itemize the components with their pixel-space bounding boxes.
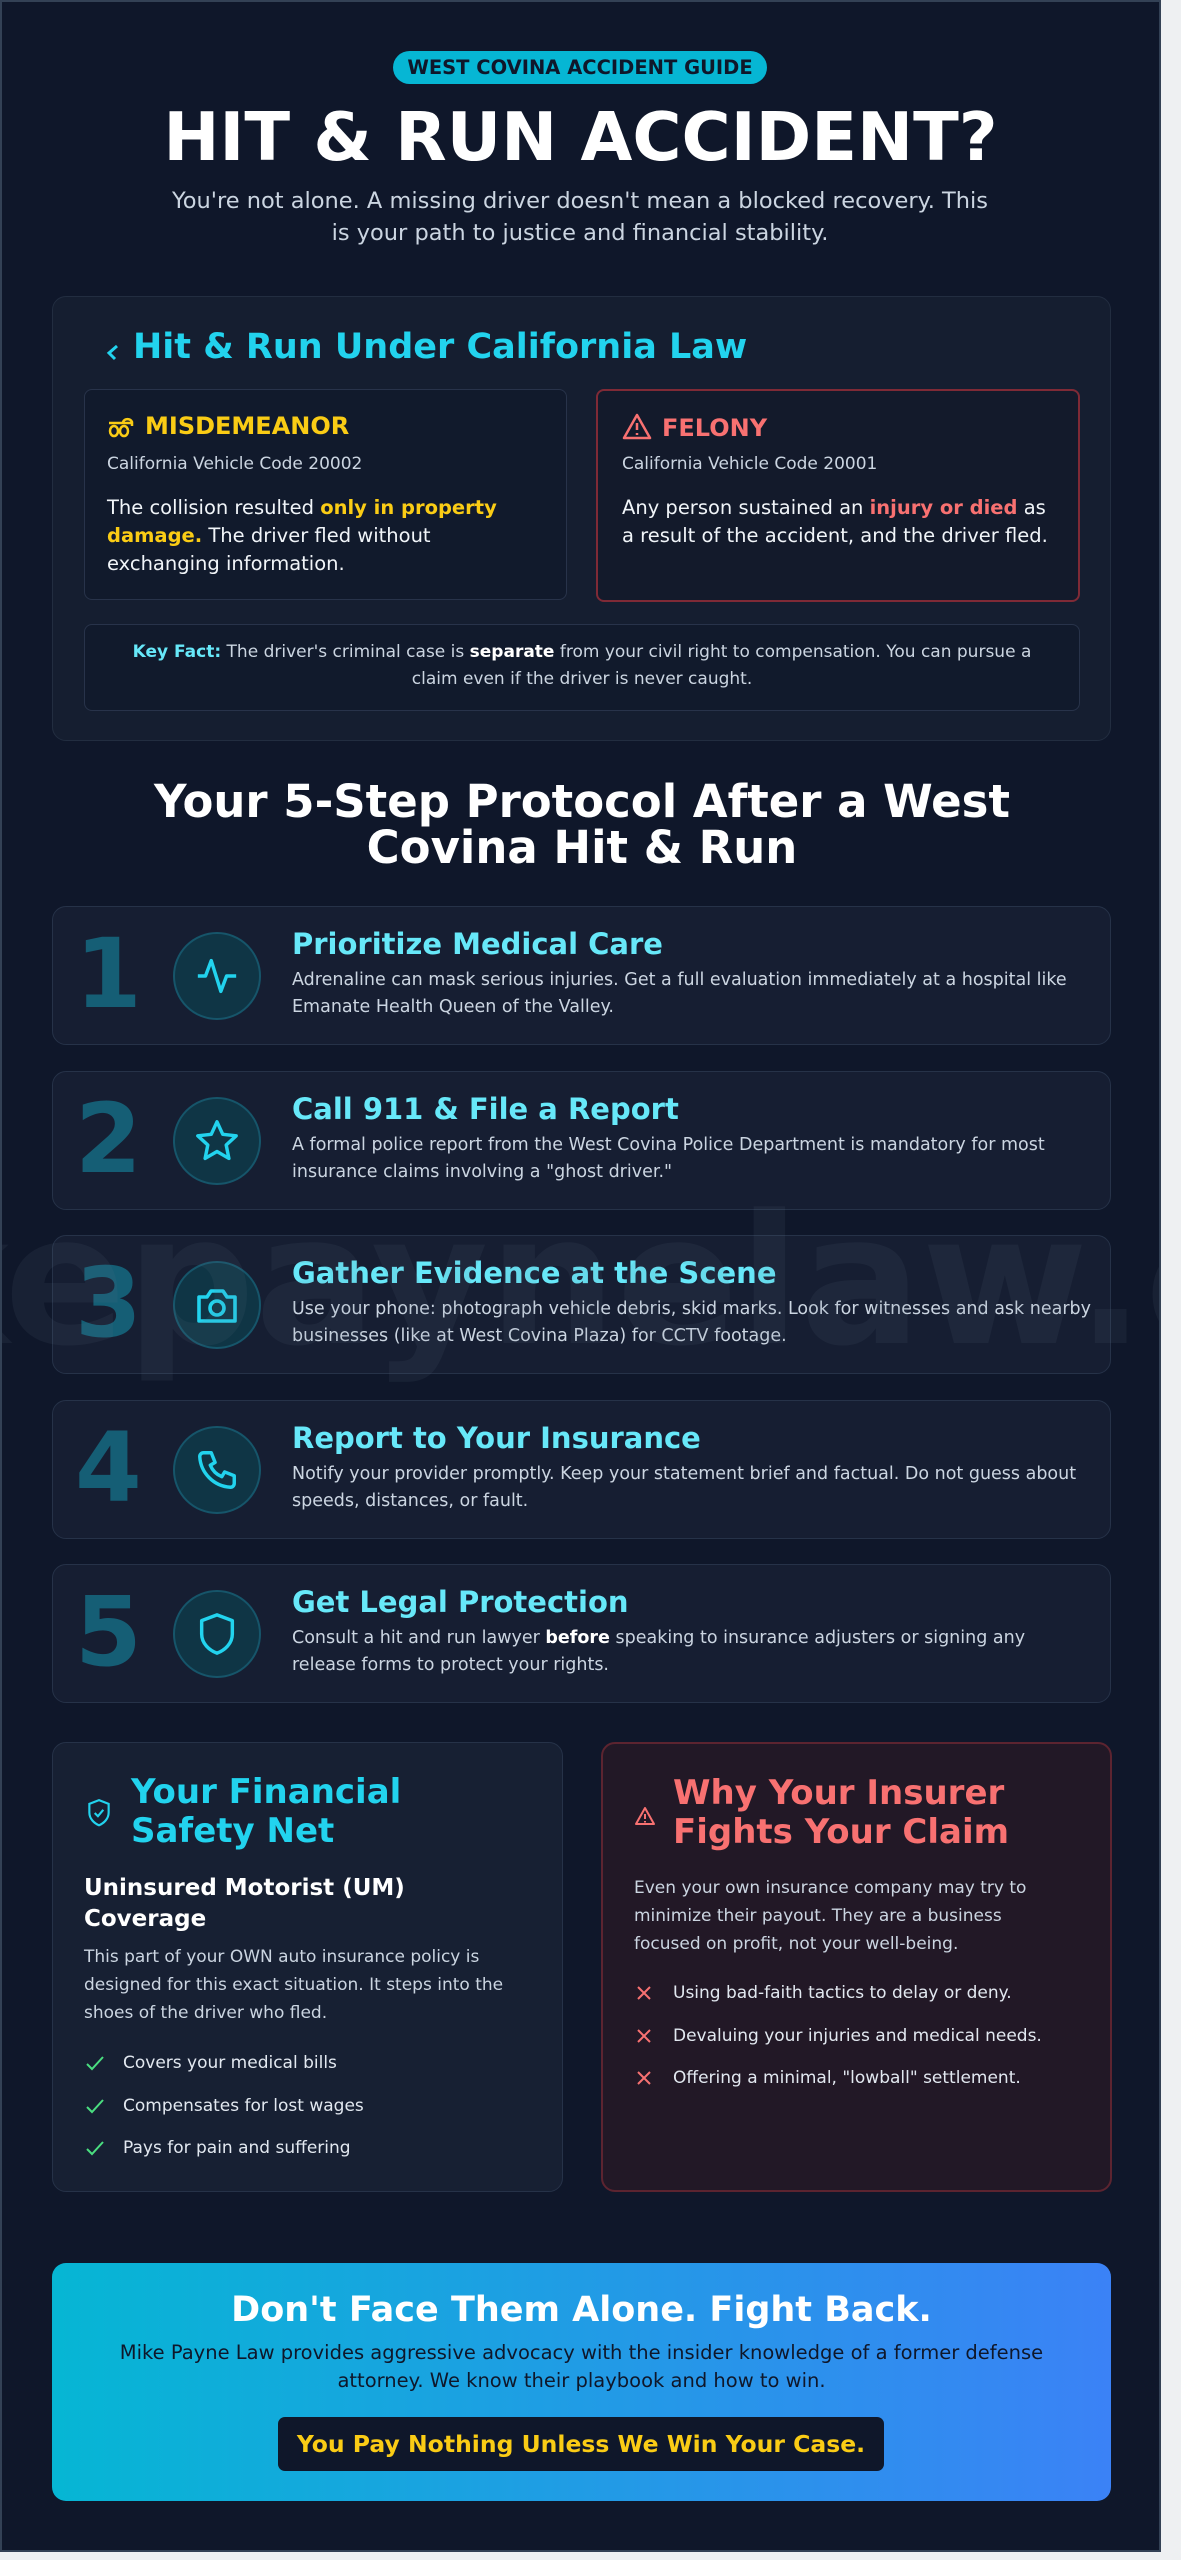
misdemeanor heading: MISDEMEANOR xyxy=(145,412,349,440)
title: HIT & RUN ACCIDENT? xyxy=(163,98,998,176)
checklist: Covers your medical bills xyxy=(123,2053,337,2073)
step 3: Use your phone: photograph vehicle debris, skid marks. Look for witnesses and ask nearby xyxy=(292,1299,1091,1319)
icon: gavel xyxy=(106,345,118,360)
CTA banner xyxy=(52,2263,1111,2501)
step 2 xyxy=(52,1071,1111,1210)
list: Devaluing your injuries and medical needs. xyxy=(673,2026,1042,2046)
subtitle: Uninsured Motorist (UM) Coverage xyxy=(84,1875,405,1932)
icon: shield check xyxy=(88,1799,110,1826)
card: felony xyxy=(596,389,1080,602)
step 5 xyxy=(52,1564,1111,1703)
step 5: Get Legal Protection xyxy=(292,1585,629,1619)
step 4: speeds, distances, or fault. xyxy=(292,1491,528,1511)
icon: warning xyxy=(622,414,652,440)
CTA button xyxy=(278,2417,884,2471)
CTA text: Mike Payne Law provides aggressive advocacy with the insider knowledge of a former defense attorney. We know their playbook and how to win. xyxy=(120,2341,1043,2392)
step 2: insurance claims involving a "ghost driver." xyxy=(292,1162,672,1182)
step 1: Adrenaline can mask serious injuries. Get a full evaluation immediately at a hospital like Emanate Health Queen of the Valley. xyxy=(292,970,1067,1017)
section heading: protocol: Your 5-Step Protocol After a West Covina Hit & Run xyxy=(154,775,1010,874)
step 4: 4 xyxy=(75,1412,142,1524)
felony heading: FELONY xyxy=(662,414,767,442)
panel: financial safety net xyxy=(52,1742,563,2192)
step 4 xyxy=(52,1400,1111,1539)
icon: pulse xyxy=(173,932,261,1020)
code: California Vehicle Code 20001 xyxy=(622,454,877,474)
step 4: Notify your provider promptly. Keep your statement brief and factual. Do not guess about xyxy=(292,1464,1076,1484)
heading: Hit & Run Under California Law xyxy=(133,327,747,367)
step 1 xyxy=(52,906,1111,1045)
card: misdemeanor xyxy=(84,389,567,600)
list: Offering a minimal, "lowball" settlement. xyxy=(673,2068,1021,2088)
title xyxy=(130,1772,401,1851)
step 1: 1 xyxy=(75,918,142,1030)
icon: phone xyxy=(173,1426,261,1514)
step 3: 3 xyxy=(75,1247,142,1359)
list xyxy=(637,1983,1042,2088)
checklist xyxy=(86,2053,364,2158)
description: Even your own insurance company may try to minimize their payout. They are a business focused on profit, not your well-being. xyxy=(634,1878,1026,1954)
step 5: 5 xyxy=(75,1576,142,1688)
panel: insurer fights claim xyxy=(601,1742,1112,2192)
subtitle xyxy=(172,188,988,246)
step 2: Call 911 & File a Report xyxy=(292,1092,679,1126)
icon: star xyxy=(173,1097,261,1185)
checklist: Compensates for lost wages xyxy=(123,2096,364,2116)
step 3 xyxy=(52,1235,1111,1374)
subtitle: You're not alone. A missing driver doesn't mean a blocked recovery. This xyxy=(172,188,988,214)
step 3: businesses (like at West Covina Plaza) for CCTV footage. xyxy=(292,1326,787,1346)
CTA button: You Pay Nothing Unless We Win Your Case. xyxy=(297,2430,865,2458)
key fact: Key Fact: The driver's criminal case is separate from your civil right to compensation. You can pursue a claim even if the driver is never caught. xyxy=(133,642,1031,689)
step 4: Report to Your Insurance xyxy=(292,1421,701,1455)
title: Fights Your Claim xyxy=(673,1812,1009,1852)
list: Using bad-faith tactics to delay or deny. xyxy=(673,1983,1012,2003)
description: Any person sustained an injury or died as a result of the accident, and the driver fled. xyxy=(622,496,1048,547)
title: Your Financial xyxy=(131,1772,401,1812)
badge: WEST COVINA ACCIDENT GUIDE xyxy=(407,56,753,79)
description: The collision resulted only in property damage. The driver fled without exchanging information. xyxy=(107,496,497,575)
step 2: 2 xyxy=(75,1083,142,1195)
panel: California law xyxy=(52,296,1111,741)
code: California Vehicle Code 20002 xyxy=(107,454,362,474)
step 5: release forms to protect your rights. xyxy=(292,1655,609,1675)
title xyxy=(673,1773,1009,1852)
description: This part of your OWN auto insurance policy is designed for this exact situation. It steps into the shoes of the driver who fled. xyxy=(84,1947,503,2023)
CTA title: Don't Face Them Alone. Fight Back. xyxy=(231,2290,932,2330)
key fact xyxy=(84,624,1080,711)
icon: camera xyxy=(173,1261,261,1349)
title: Why Your Insurer xyxy=(673,1773,1004,1813)
icon: warning xyxy=(635,1807,655,1825)
step 2: A formal police report from the West Covina Police Department is mandatory for most xyxy=(292,1135,1045,1155)
step 5: Consult a hit and run lawyer before speaking to insurance adjusters or signing any xyxy=(292,1628,1025,1648)
badge xyxy=(393,51,767,84)
checklist: Pays for pain and suffering xyxy=(123,2138,351,2158)
icon: handcuffs xyxy=(108,418,134,438)
step 3: Gather Evidence at the Scene xyxy=(292,1256,776,1290)
title: Safety Net xyxy=(131,1811,334,1851)
icon: shield xyxy=(173,1590,261,1678)
step 1: Prioritize Medical Care xyxy=(292,927,663,961)
subtitle: is your path to justice and financial stability. xyxy=(332,220,828,246)
